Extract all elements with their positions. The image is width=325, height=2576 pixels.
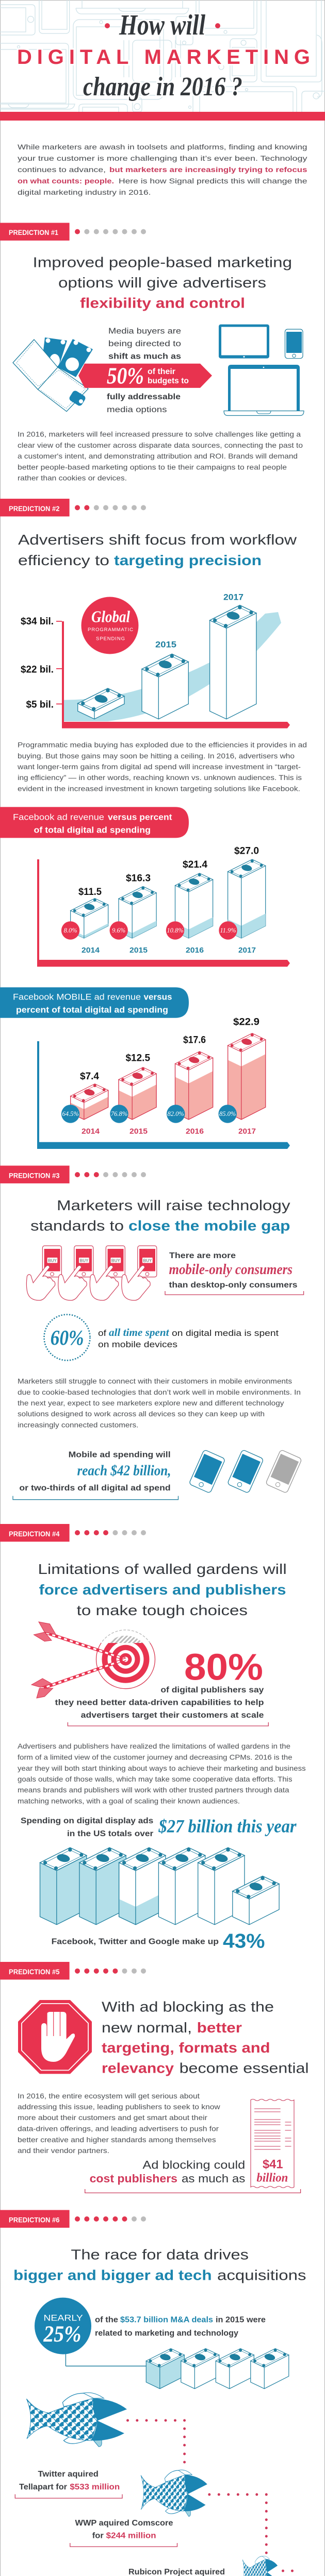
prediction tag 1: PREDICTION #1 (9, 229, 59, 236)
body text: increasingly connected customers. (18, 1421, 138, 1429)
body text: Programmatic media buying has exploded due to the efficiencies it provides in ad (18, 740, 307, 749)
heading: targeting, formats and (102, 2040, 270, 2056)
icon: phones with BUY buttons and hands: BUY (79, 1258, 89, 1263)
stack: 2014 (71, 1084, 108, 1120)
pill: Facebook ad revenue: Facebook ad revenue (13, 812, 104, 822)
prediction tag 5: PREDICTION #5 (9, 1968, 60, 1976)
body text: buying. But those gains may soon be hitting a ceiling. In 2016, advertisers who (18, 752, 295, 760)
chart: Facebook mobile ad revenue (37, 1017, 290, 1149)
text: budget shift: media options (107, 405, 167, 414)
icon: big fish (26, 2393, 127, 2447)
prediction tag 3 (0, 1165, 146, 1183)
prediction tag 4: PREDICTION #4 (9, 1530, 60, 1538)
prediction tag 3: PREDICTION #3 (9, 1172, 60, 1179)
icon: phones with BUY buttons and hands (26, 1246, 157, 1300)
percent badges: 82.0% (168, 1110, 184, 1117)
chart: four money stacks (146, 2348, 289, 2388)
years: 2017 (238, 946, 256, 955)
icon: receipt $41 billion (251, 2099, 294, 2188)
body text (18, 2092, 221, 2155)
body text: and their vendor partners. (18, 2146, 109, 2155)
callout: Twitter acquisition (15, 2470, 122, 2498)
body text: evident in the increased investment in known targeting solutions like Facebook. (18, 784, 300, 792)
intro paragraph: While marketers are awash in toolsets and platforms, finding and knowing (18, 143, 307, 151)
stat: nearly 25 percent: $53.7 billion M&A deals (120, 2315, 213, 2325)
body text: goals outside of those walls, which may take some cooperative data efforts. This (18, 1775, 292, 1783)
icon: laptop (224, 365, 304, 415)
text: budget shift: being directed to (108, 340, 181, 348)
pill: Facebook ad revenue (0, 807, 189, 838)
stack: first (78, 688, 124, 719)
stack: 2016 (175, 873, 213, 938)
heading: close the mobile gap (128, 1218, 290, 1234)
body text: better creative and higher standards among themselves (18, 2136, 216, 2144)
callout: Twitter acquisition: Tellapart for (19, 2483, 67, 2492)
callout: WPP acquisition: for (92, 2531, 104, 2540)
callout: WPP acquisition: $244 million (106, 2531, 156, 2540)
body text: form of a limited view of the customer journey and decreasing CPMs. 2016 is the (18, 1753, 293, 1761)
stat: 60 percent (44, 1315, 279, 1360)
stat: nearly 25 percent: of the (95, 2315, 118, 2325)
arrow: 50 percent callout: of their (148, 367, 175, 376)
icon: wallet with money (13, 337, 93, 412)
dotted path: big fish to medium fish (126, 2419, 186, 2464)
red band (0, 112, 325, 121)
icon: phone (285, 329, 303, 359)
heading (102, 1999, 309, 2076)
intro paragraph: Here is how Signal predicts this will change the (119, 177, 307, 185)
heading (33, 255, 292, 311)
year labels: 2015 (155, 639, 176, 649)
callout: mobile-only consumers: than desktop-only consumers (169, 1281, 297, 1290)
callout: display ad spending: $27 billion this year (158, 1816, 297, 1836)
callout: Twitter acquisition: Twitter aquired (38, 2470, 99, 2479)
callout: mobile-only consumers (165, 1251, 304, 1295)
panel: prediction 3 (0, 1165, 304, 1500)
body text: ing efficiency” — in other words, reaching known vs. unknown audiences. This is (18, 773, 302, 782)
axis labels (21, 616, 54, 710)
pill: Facebook mobile ad revenue: Facebook MOBILE ad revenue (13, 993, 141, 1002)
heading: become essential (180, 2060, 309, 2076)
arrow: 50 percent callout (78, 363, 212, 389)
prediction tag 6 (0, 2210, 146, 2228)
stat: 43 percent: 43% (223, 1930, 265, 1953)
stat: 80 percent: they need better data-driven capabilities to help (55, 1699, 264, 1707)
badge: global programmatic spending: SPENDING (96, 636, 125, 642)
stat: nearly 25 percent: in 2015 were (216, 2315, 266, 2325)
callout: display ad spending: in the US totals over (67, 1829, 153, 1838)
heading: flexibility and control (80, 295, 245, 311)
body text: matching networks, with a goal of scaling their known audiences. (18, 1797, 240, 1805)
prediction tag 6: PREDICTION #6 (9, 2216, 60, 2224)
stat: nearly 25 percent: related to marketing and technology (95, 2329, 238, 2338)
stat: 60 percent: of (98, 1328, 106, 1338)
icon: three tilted phones (189, 1450, 302, 1493)
chart: global programmatic spending (21, 592, 290, 728)
stat: 80 percent (55, 1647, 268, 1726)
panel: prediction 5 (0, 1962, 309, 2193)
icon: phones with BUY buttons and hands: BUY (143, 1258, 152, 1263)
growth curve (63, 612, 281, 721)
intro paragraph (18, 143, 307, 196)
callout: ad blocking cost (85, 2158, 301, 2193)
body text: better people-based marketing options to tie their campaigns to real people (18, 463, 287, 471)
body text (17, 740, 307, 792)
axis labels: $34 bil. (21, 616, 54, 627)
icon: target with arrows (31, 1622, 155, 1698)
heading: targeting precision (114, 552, 262, 568)
body text: In 2016, the entire ecosystem will get serious about (18, 2092, 200, 2100)
percent badges: 64.5% (62, 1110, 79, 1117)
pill: Facebook ad revenue: of total digital ad spending (34, 825, 151, 835)
stack: 2017 (210, 605, 256, 719)
intro paragraph: digital marketing industry in 2016. (18, 188, 151, 196)
panel: prediction 1 (0, 223, 304, 482)
callout: mobile ad spending (13, 1451, 178, 1500)
body text: In 2016, marketers will feel increased pressure to solve challenges like getting a (18, 430, 301, 438)
badge: global programmatic spending: PROGRAMMATIC (88, 627, 133, 633)
body text (18, 430, 303, 482)
icon: medium fish (141, 2470, 207, 2516)
years: 2014 (82, 1127, 100, 1136)
axis labels: $5 bil. (26, 700, 54, 710)
years: 2017 (238, 1127, 256, 1136)
callout: mobile ad spending: Mobile ad spending will (69, 1451, 171, 1460)
values: $7.4 (80, 1071, 99, 1082)
callout: WPP acquisition (70, 2519, 177, 2547)
badge: global programmatic spending: Global (91, 607, 130, 625)
title: DIGITAL MARKETING (17, 46, 310, 69)
stat: nearly 25 percent: 25% (43, 2321, 81, 2346)
percent badges: 9.6% (112, 927, 125, 934)
values (80, 1017, 259, 1082)
stack: 2017 (228, 859, 266, 938)
callout: ad blocking cost: as much as (182, 2172, 245, 2185)
heading (18, 532, 297, 568)
axis (56, 621, 290, 728)
body text: more about their customers and get smart about their (18, 2113, 207, 2122)
heading: Marketers will raise technology (57, 1197, 290, 1213)
chart: Facebook ad revenue (37, 846, 290, 967)
years: 2014 (82, 946, 100, 955)
text: budget shift: shift as much as (108, 352, 181, 361)
values: $12.5 (126, 1053, 150, 1064)
stat: 60 percent: all time spent (109, 1326, 170, 1338)
year labels (155, 592, 243, 649)
stack: 2015 (142, 654, 188, 719)
stat: 60 percent: on digital media is spent (172, 1328, 279, 1338)
stat: 80 percent: 80% (184, 1647, 263, 1688)
arrow: 50 percent callout: budgets to (148, 377, 189, 385)
stack: 2016 (175, 1052, 213, 1120)
percent badges: 76.8% (111, 1110, 127, 1117)
chart: six money stacks (40, 1848, 279, 1925)
pill: Facebook ad revenue: versus percent (108, 812, 172, 822)
body text: data-driven offerings, and leading advertisers to push for (18, 2124, 219, 2132)
heading: bigger and bigger ad tech (13, 2267, 212, 2283)
panel: prediction 4 (0, 1524, 306, 1953)
callout: mobile ad spending: or two-thirds of all digital ad spend (19, 1484, 171, 1493)
title: How will (119, 9, 205, 41)
axis (37, 1041, 290, 1149)
values (78, 846, 259, 897)
stat: 80 percent: advertisers target their customers at scale (81, 1711, 264, 1720)
text: budget shift (78, 327, 212, 414)
years: 2016 (186, 946, 204, 955)
heading: force advertisers and publishers (39, 1582, 286, 1598)
callout: WPP acquisition: WWP aquired Comscore (75, 2519, 173, 2528)
values: $11.5 (78, 887, 102, 897)
dotted path: medium fish to small fish (208, 2493, 268, 2554)
callout: display ad spending (21, 1816, 297, 1838)
title: change in 2016 ? (83, 72, 242, 101)
heading (38, 1561, 287, 1618)
heading: relevancy (102, 2060, 174, 2076)
heading (13, 2246, 306, 2283)
body text: clear view of the customer across disparate data sources, connecting the past to (18, 441, 303, 449)
title (17, 9, 310, 101)
stat: 60 percent: 60% (51, 1326, 84, 1349)
heading: Limitations of walled gardens will (38, 1561, 287, 1577)
heading: to make tough choices (77, 1602, 248, 1618)
stack: 2014 (71, 899, 108, 938)
heading: With ad blocking as the (102, 1999, 274, 2015)
axis (37, 859, 290, 967)
panel: prediction 2 (0, 499, 307, 1149)
body text: a customer's intent, and demonstrating attribution and ROI. Brands will demand (18, 452, 298, 460)
percent badges: 8.0% (64, 927, 77, 934)
years (82, 1127, 256, 1136)
heading: Improved people-based marketing (33, 255, 292, 270)
years: 2015 (129, 946, 148, 955)
heading: efficiency to (18, 552, 109, 568)
text: budget shift: fully addressable (107, 393, 181, 401)
text: budget shift: Media buyers are (108, 327, 181, 336)
intro paragraph: but marketers are increasingly trying to refocus (109, 165, 307, 174)
years: 2016 (186, 1127, 204, 1136)
axis labels: $22 bil. (21, 665, 54, 675)
percent badges: 11.9% (220, 927, 236, 934)
heading: Advertisers shift focus from workflow (18, 532, 297, 548)
pill: Facebook mobile ad revenue (0, 987, 189, 1018)
callout: Twitter acquisition: $533 million (70, 2483, 120, 2492)
stat: 43 percent (52, 1930, 265, 1953)
callout: ad blocking cost: cost publishers (90, 2172, 177, 2185)
pill: Facebook mobile ad revenue: percent of total digital ad spending (16, 1006, 168, 1015)
callout: mobile-only consumers: mobile-only consumers (169, 1262, 293, 1278)
body text: year they will both start thinking about ways to achieve their marketing and business (18, 1764, 306, 1772)
prediction tag 1 (0, 223, 146, 241)
values: $22.9 (233, 1017, 259, 1028)
prediction tag 2: PREDICTION #2 (9, 505, 60, 513)
heading: new normal, (102, 2020, 192, 2036)
icon: receipt $41 billion: billion (256, 2171, 288, 2184)
stat: nearly 25 percent (35, 2298, 266, 2366)
heading: better (197, 2020, 242, 2036)
prediction tag 4 (0, 1524, 146, 1541)
heading: standards to (30, 1218, 124, 1234)
values: $17.6 (183, 1035, 206, 1046)
icon: receipt $41 billion: $41 (263, 2158, 283, 2172)
body text: want longer-term gains from digital ad spend will increase investment in “target- (17, 762, 301, 771)
pill: Facebook mobile ad revenue: versus (143, 993, 172, 1002)
stat: 80 percent: of digital publishers say (160, 1686, 264, 1694)
body text: due to cookie-based technologies that don’t work well in mobile environments. In (18, 1388, 301, 1396)
body text: rather than cookies or devices. (18, 474, 127, 482)
values: $27.0 (234, 846, 259, 856)
years (82, 946, 256, 955)
body text: solutions designed to work across all devices so they can keep up with (18, 1410, 265, 1418)
heading: The race for data drives (71, 2246, 249, 2262)
icon: phones with BUY buttons and hands: BUY (48, 1258, 57, 1263)
prediction tag 2 (0, 499, 146, 516)
stack: 2017 (228, 1033, 266, 1120)
values: $21.4 (183, 859, 207, 870)
body text: the next year, expect to see marketers explore new and different technology (18, 1399, 284, 1407)
callout: mobile-only consumers: There are more (169, 1251, 236, 1260)
stat: nearly 25 percent: NEARLY (43, 2313, 83, 2323)
badge: global programmatic spending (82, 597, 138, 654)
percent badges (61, 1105, 237, 1123)
stack: 2015 (119, 887, 156, 938)
dots after small fish (282, 2570, 294, 2572)
panel: header (0, 0, 325, 121)
body text: Marketers still struggle to connect with their customers in mobile environments (18, 1377, 292, 1385)
arrow: 50 percent callout: 50% (107, 363, 144, 389)
body text (18, 1377, 301, 1429)
icon: phones with BUY buttons and hands: BUY (111, 1258, 121, 1263)
stat: 43 percent: Facebook, Twitter and Google make up (52, 1938, 219, 1946)
body text (18, 1742, 306, 1805)
icon: tablet (219, 325, 269, 359)
callout: ad blocking cost: Ad blocking could (142, 2158, 245, 2171)
heading (30, 1197, 290, 1234)
intro paragraph: on what counts: people. (18, 177, 114, 185)
heading: acquisitions (217, 2267, 306, 2283)
values: $16.3 (126, 873, 151, 884)
percent badges: 10.8% (167, 927, 184, 934)
icon: small fish (242, 2556, 278, 2576)
heading: options will give advertisers (58, 275, 266, 291)
icon: stop sign with hand (18, 2000, 92, 2074)
percent badges (61, 921, 237, 940)
stat: 60 percent: on mobile devices (98, 1340, 177, 1349)
body text: means brands and publishers will work with other trusted partners through data (18, 1786, 289, 1794)
callout: mobile ad spending: reach $42 billion, (77, 1463, 171, 1479)
intro paragraph: continues to advance, (18, 165, 106, 174)
panel: prediction 6 (0, 2210, 306, 2576)
years: 2015 (129, 1127, 148, 1136)
stack: 2015 (119, 1067, 156, 1120)
percent badges: 85.0% (219, 1110, 236, 1117)
device outline background (0, 0, 325, 112)
body text: addressing this issue, leading publishers to seek to know (18, 2103, 221, 2111)
year labels: 2017 (223, 592, 243, 602)
intro paragraph: your true customer is more challenging than it’s ever been. Technology (18, 154, 307, 162)
prediction tag 5 (0, 1962, 146, 1979)
body text: Advertisers and publishers have realized the limitations of walled gardens in the (18, 1742, 290, 1750)
callout: display ad spending: Spending on digital display ads (21, 1817, 153, 1825)
